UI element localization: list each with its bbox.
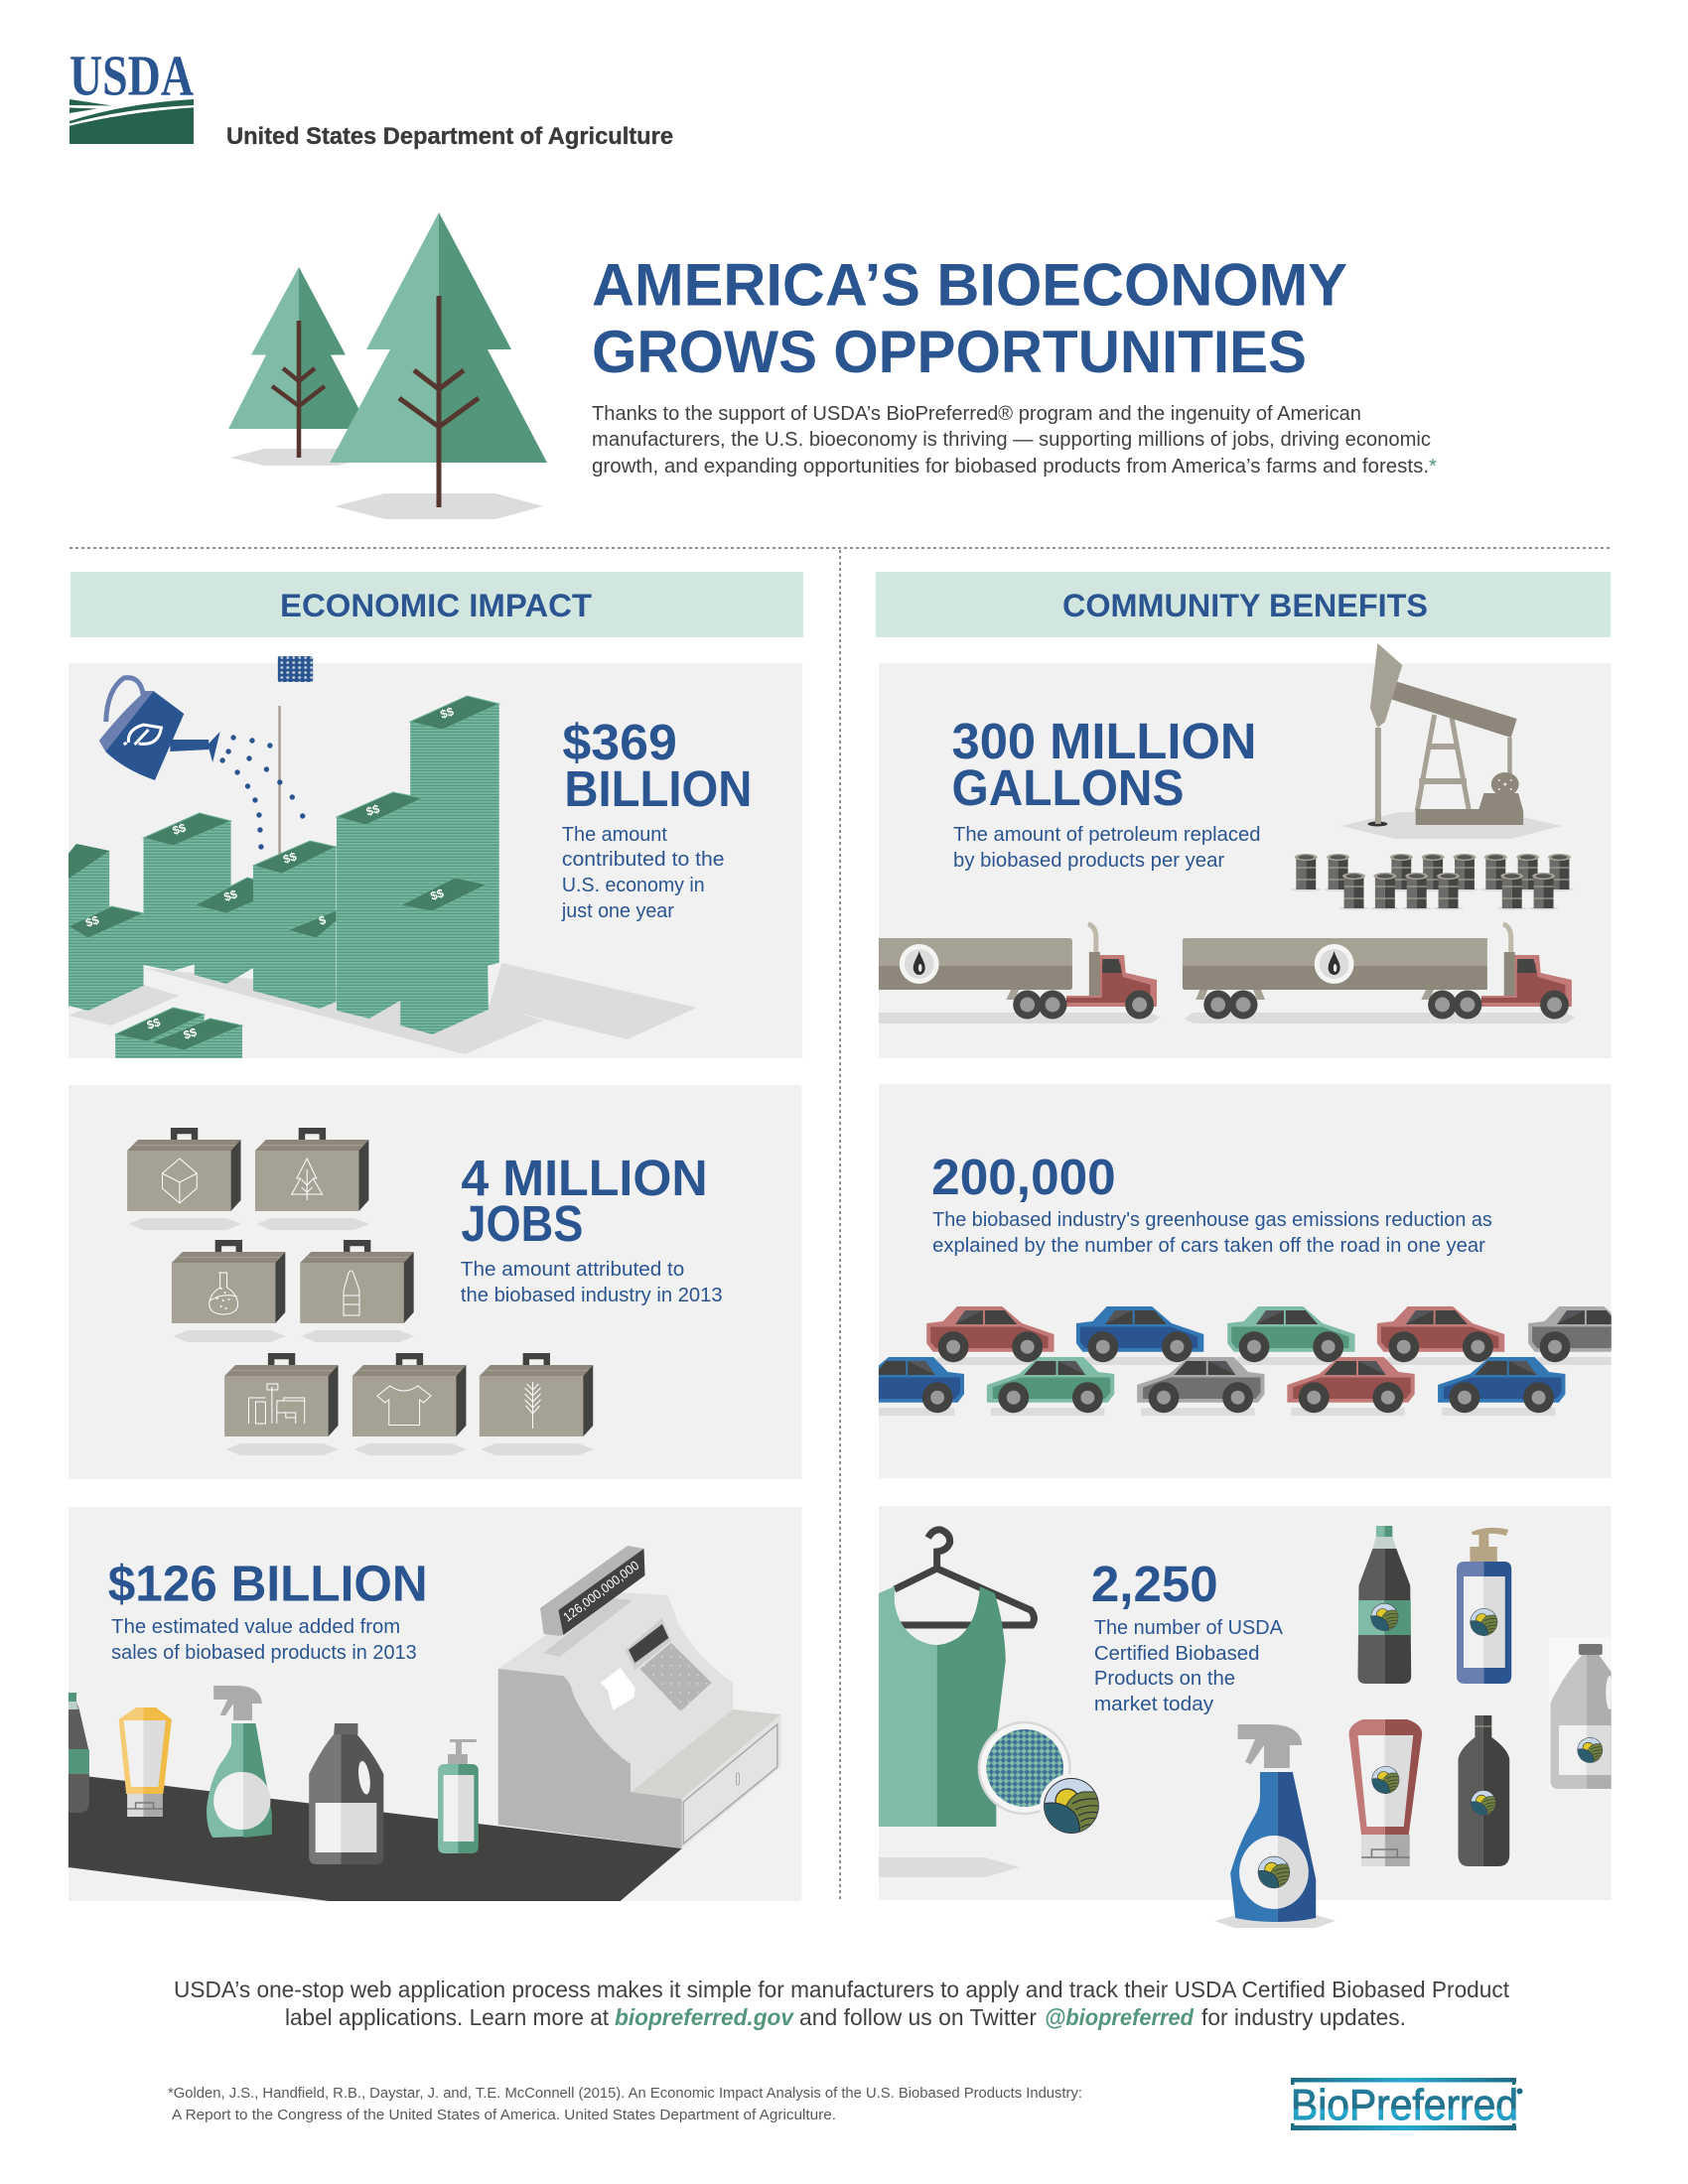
chart: money stacks: $ (317, 912, 328, 928)
stat: 300 million gallons: 300 MILLION (952, 713, 1257, 769)
heading: economic impact (70, 572, 803, 637)
call to action text: label applications. Learn more at (285, 2004, 610, 2030)
stat: $369 billion (562, 714, 752, 817)
description: explained by the number of cars taken off the road in one year (932, 1234, 1485, 1257)
description (1094, 1616, 1283, 1715)
heading: community benefits: COMMUNITY BENEFITS (1062, 588, 1428, 623)
description: The number of USDA (1094, 1616, 1283, 1639)
description: The amount attributed to (461, 1258, 684, 1281)
description (111, 1615, 417, 1664)
call to action text: and follow us on Twitter (799, 2004, 1037, 2030)
icon: gray jug (309, 1723, 383, 1864)
description: U.S. economy in (562, 874, 705, 896)
description (953, 823, 1260, 872)
description: The estimated value added from (111, 1615, 400, 1638)
icon: dark bottle (69, 1693, 89, 1813)
icon: case with tree (255, 1128, 369, 1230)
title (592, 252, 1347, 385)
icon: case with shirt (352, 1353, 467, 1455)
panel: 200,000 cars (878, 1084, 1612, 1478)
icon: tanker truck 2 (1183, 924, 1575, 1024)
icon: blue spray bottle (1214, 1724, 1336, 1928)
footnote (168, 2086, 1082, 2123)
flag (278, 656, 313, 855)
icon: case with bottle (300, 1240, 414, 1342)
chart: money stacks: $$ (364, 801, 381, 819)
description: the biobased industry in 2013 (461, 1284, 723, 1306)
chart: money stacks: $$ (429, 886, 446, 903)
chart: money stacks: $$ (145, 1015, 162, 1032)
icon: case with cube (127, 1128, 241, 1230)
stat: 4 million jobs: JOBS (461, 1195, 583, 1252)
description: just one year (561, 899, 674, 922)
call to action text (174, 1977, 1510, 2030)
icon: tanker truck 1 (879, 924, 1160, 1024)
intro paragraph (592, 403, 1437, 478)
title: AMERICA’S BIOECONOMY (592, 252, 1347, 318)
icon: blue pump bottle (1457, 1528, 1511, 1684)
register display: 126,000,000,000 (560, 1558, 641, 1624)
icon: gray jug (1551, 1644, 1612, 1789)
call to action text: @biopreferred (1045, 2004, 1195, 2030)
logo wordmark: USDA (70, 44, 194, 108)
chart: money stacks: $$ (171, 820, 188, 838)
footnote: *Golden, J.S., Handfield, R.B., Daystar, J. and, T.E. McConnell (2015). An Economic Impact Analysis of the U.S. Biobased Products Industry: (168, 2086, 1082, 2102)
description: Certified Biobased (1094, 1642, 1259, 1665)
icon: hanger (895, 1530, 1034, 1625)
icon: pump bottle (438, 1739, 479, 1853)
icon: garment shadow (879, 1857, 1020, 1877)
icon: fabric close-up (979, 1722, 1103, 1838)
description: by biobased products per year (953, 849, 1224, 872)
call to action text: USDA’s one-stop web application process makes it simple for manufacturers to apply and track their USDA Certified Biobased Product (174, 1977, 1510, 2002)
chart: money stacks (69, 696, 697, 1058)
heading: economic impact: ECONOMIC IMPACT (280, 588, 592, 623)
chart: money stacks: $$ (182, 1024, 199, 1042)
icon: case with wheat (480, 1353, 594, 1455)
logo landscape (70, 99, 194, 144)
USDA logo (70, 44, 194, 144)
description: The amount (562, 823, 667, 846)
intro paragraph: growth, and expanding opportunities for biobased products from America’s farms and forests. * (592, 456, 1437, 478)
stat: 2,250: 2,250 (1091, 1556, 1218, 1612)
description (561, 823, 725, 922)
stat: 300 million gallons: GALLONS (952, 759, 1184, 816)
stat: $369 billion: $369 (562, 714, 677, 770)
stat: $369 billion: BILLION (564, 760, 752, 817)
icon: oil pump (1340, 643, 1561, 839)
BioPreferred logo: BioPreferred (1291, 2081, 1518, 2129)
icon: dark bottle (1458, 1715, 1509, 1866)
panel: $369 billion (69, 656, 802, 1058)
icon: watering can (99, 678, 220, 780)
stat: 4 million jobs: 4 MILLION (461, 1150, 708, 1206)
icon: soda bottle (1358, 1526, 1411, 1684)
chart: money stacks: $$ (281, 849, 299, 867)
intro paragraph: manufacturers, the U.S. bioeconomy is thriving — supporting millions of jobs, driving economic (592, 429, 1431, 451)
panel: 4 million jobs (69, 1085, 801, 1479)
description: market today (1094, 1693, 1214, 1715)
icon: case with factory (224, 1353, 339, 1455)
icon: yellow tube (119, 1707, 172, 1817)
call to action text: biopreferred.gov (615, 2004, 794, 2030)
intro paragraph: Thanks to the support of USDA’s BioPreferred® program and the ingenuity of American (592, 403, 1361, 425)
chart: money stacks: $$ (222, 887, 239, 904)
icon: red tube (1349, 1719, 1422, 1866)
panel: 2,250 products (879, 1506, 1614, 1928)
description: sales of biobased products in 2013 (111, 1641, 417, 1664)
icon: case with flask (172, 1240, 286, 1342)
call to action text: for industry updates. (1201, 2004, 1406, 2030)
illustration: trees (228, 212, 547, 519)
description: The amount of petroleum replaced (953, 823, 1260, 846)
stat: 200,000: 200,000 (931, 1149, 1116, 1205)
icon: tank top (879, 1586, 1006, 1827)
description: The biobased industry's greenhouse gas emissions reduction as (932, 1208, 1492, 1231)
chart: money stacks: $$ (83, 912, 101, 930)
icon: green spray bottle (207, 1686, 272, 1838)
description (932, 1208, 1492, 1257)
stat: 300 million gallons (952, 713, 1257, 816)
heading: community benefits (876, 572, 1611, 637)
title: GROWS OPPORTUNITIES (592, 319, 1307, 385)
icon: oil barrels (1291, 854, 1574, 910)
panel: 300 million gallons (879, 643, 1612, 1058)
conveyor belt (69, 1774, 682, 1901)
icon: cars (878, 1306, 1612, 1416)
description (461, 1258, 723, 1306)
water drops (219, 735, 305, 850)
description: contributed to the (562, 848, 725, 871)
description: Products on the (1094, 1667, 1235, 1690)
footnote: A Report to the Congress of the United States of America. United States Department of Agriculture. (172, 2108, 836, 2123)
department name: United States Department of Agriculture (226, 123, 673, 150)
icon: cash register (498, 1546, 780, 1848)
panel: $126 billion (69, 1507, 801, 1901)
chart: money stacks: $$ (439, 704, 456, 722)
stat: 4 million jobs (461, 1150, 708, 1252)
stat: $126 billion: $126 BILLION (108, 1556, 428, 1612)
